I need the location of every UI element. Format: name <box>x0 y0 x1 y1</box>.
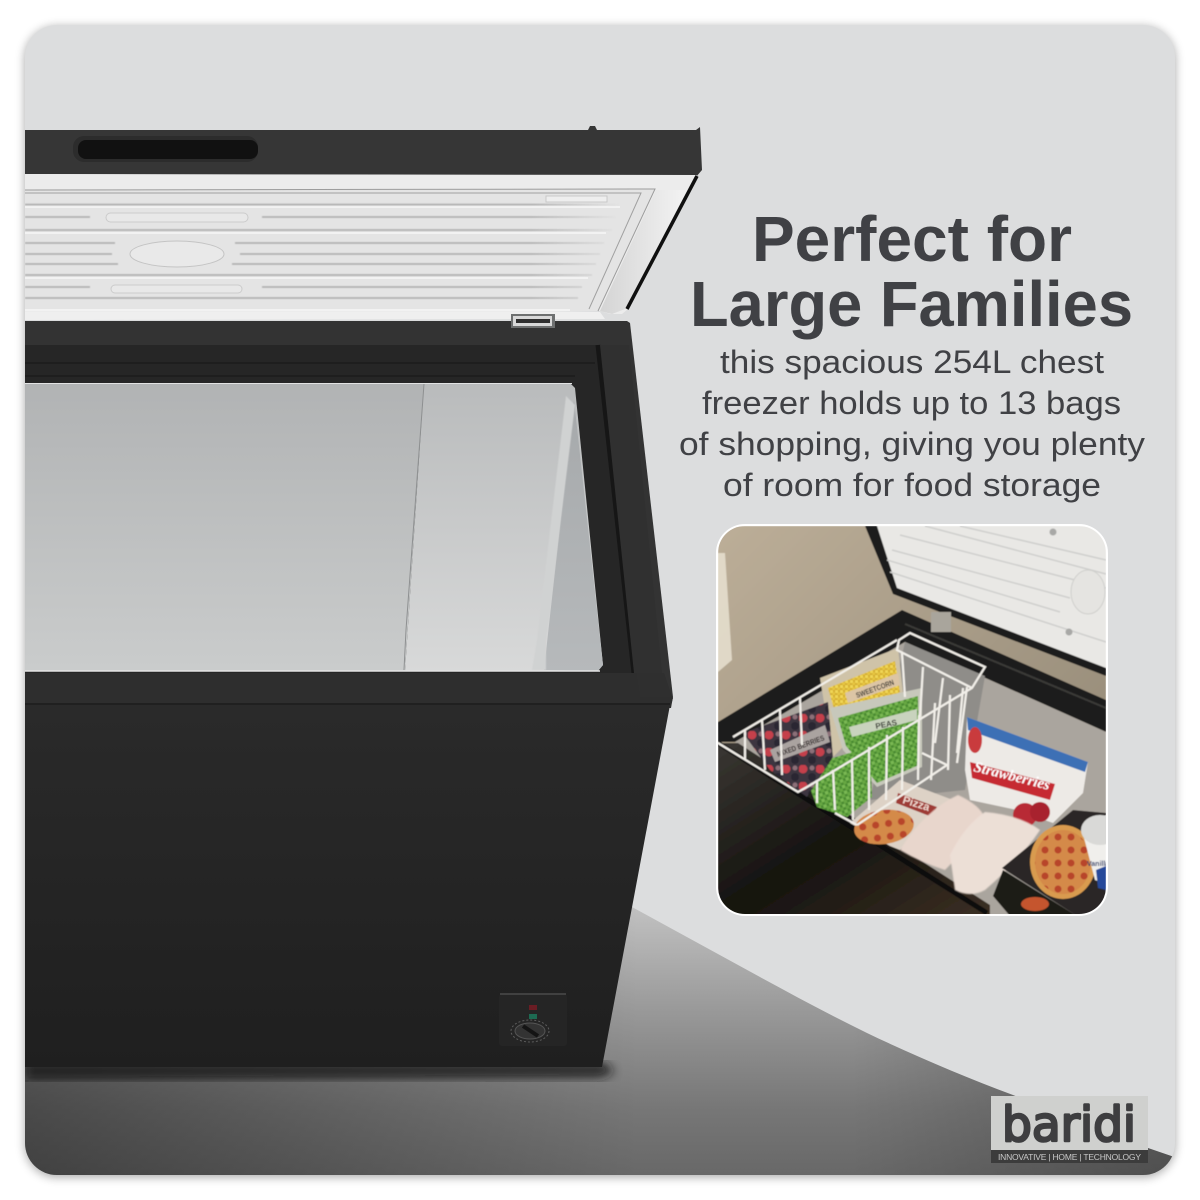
inset photo frame <box>716 524 1108 916</box>
pizza box <box>850 780 953 850</box>
tub label: Vanilla <box>1087 861 1109 868</box>
ice cream tub <box>1081 815 1119 890</box>
description text <box>679 344 1146 503</box>
strawberries label: Strawberries <box>972 759 1052 794</box>
control panel <box>499 994 567 1046</box>
berries bag <box>743 702 833 797</box>
peas label: PEAS <box>875 718 898 731</box>
lid lower pill <box>111 285 242 293</box>
berries label: MIXED BERRIES <box>776 733 826 759</box>
lid outer black strip <box>25 126 702 177</box>
freezer front wall <box>718 743 990 916</box>
peas bag back <box>830 688 922 787</box>
wall <box>718 526 1106 744</box>
freezer rim <box>25 321 673 708</box>
sweetcorn label: SWEETCORN <box>855 678 895 700</box>
lid upper pill <box>106 213 248 222</box>
hinge <box>931 612 951 632</box>
description text: of room for food storage <box>723 467 1101 503</box>
temperature dial <box>511 1020 549 1042</box>
brand name: baridi <box>1002 1097 1136 1153</box>
sweetcorn bag <box>820 648 903 757</box>
pizza label: Pizza <box>901 794 932 814</box>
freezer interior <box>735 642 1106 916</box>
heading <box>694 214 1130 340</box>
freezer front body <box>25 705 670 1067</box>
lid oval embossing <box>130 241 224 267</box>
pizza stack <box>993 810 1106 916</box>
lid liner panel <box>25 189 655 311</box>
red indicator <box>529 1005 537 1010</box>
description text: freezer holds up to 13 bags <box>702 385 1121 421</box>
strawberries bag <box>965 717 1088 827</box>
inset photo <box>718 526 1119 916</box>
rim inner recess <box>25 345 634 673</box>
hinge <box>511 314 555 328</box>
tagline: INNOVATIVE | HOME | TECHNOLOGY <box>998 1152 1141 1162</box>
description text: of shopping, giving you plenty <box>679 426 1146 462</box>
lid inner frame <box>25 174 697 320</box>
green indicator <box>529 1014 537 1019</box>
freezer shadow <box>25 1062 615 1080</box>
freezer interior <box>25 383 603 671</box>
freezer rim <box>718 610 1106 742</box>
peas bag front <box>802 747 872 817</box>
front lip <box>632 673 673 701</box>
open lid <box>865 526 1106 676</box>
lid small label <box>546 196 607 202</box>
right rim side <box>600 345 636 673</box>
heading: Large Families <box>690 268 1133 340</box>
freezer <box>25 126 702 1080</box>
floor <box>20 900 1180 1180</box>
logo <box>991 1096 1148 1163</box>
lid handle <box>73 136 258 162</box>
wire basket <box>718 633 985 825</box>
heading: Perfect for <box>752 203 1072 275</box>
lid edge line <box>627 176 697 309</box>
description text: this spacious 254L chest <box>720 344 1104 380</box>
chicken packs <box>900 795 1040 894</box>
